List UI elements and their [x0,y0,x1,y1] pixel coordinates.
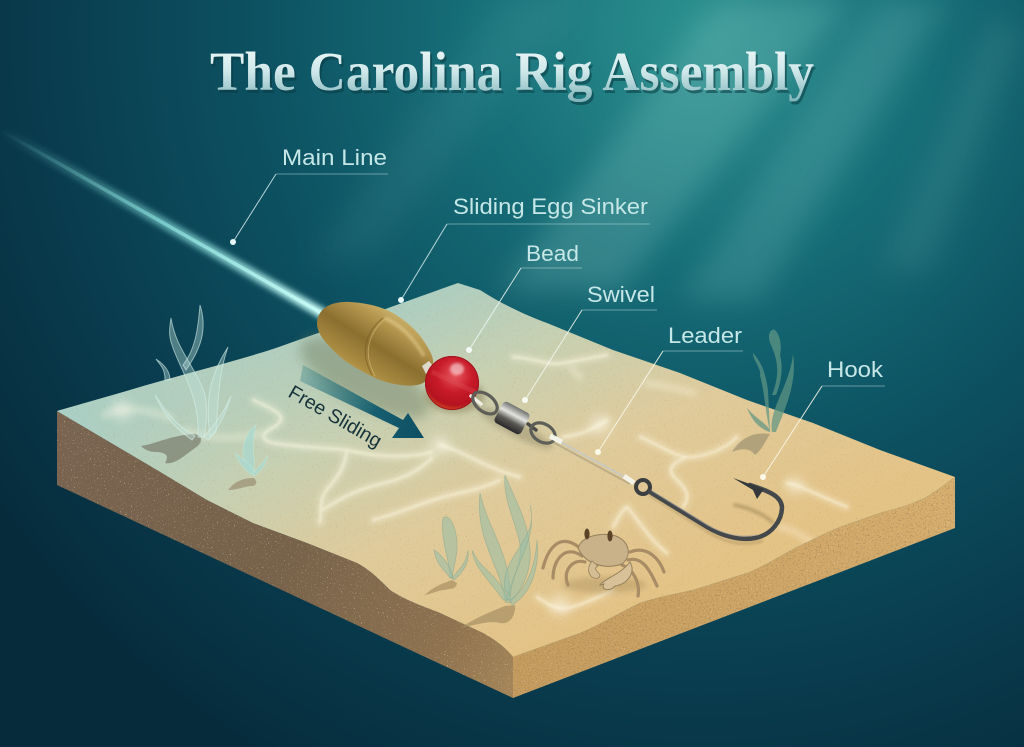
label: hook [760,357,885,480]
hook [636,478,782,543]
label: swivel: Swivel [587,282,655,307]
plant: back left seagrass [141,305,231,463]
label: sliding egg sinker: Sliding Egg Sinker [453,194,648,219]
main line [0,130,325,315]
swivel [469,388,559,455]
red bead [425,356,485,413]
sand block sides [57,411,955,698]
label: sliding egg sinker [398,194,650,303]
plant: front seagrass [425,475,538,628]
label: bead: Bead [526,241,579,266]
plant: small front left [228,425,268,490]
label: main line: Main Line [282,145,387,170]
leader line [550,436,634,484]
callout labels [230,145,885,480]
label: leader [595,323,743,455]
sliding egg sinker [317,302,433,386]
crab [543,528,664,596]
water caustics [105,355,847,615]
plant: back right seagrass [732,330,794,455]
directional arrow: free sliding [284,365,424,452]
caustic glow spots [113,401,803,615]
label: main line [230,145,388,245]
label: hook: Hook [827,357,884,382]
directional arrow: free sliding: Free Sliding [284,381,386,452]
light rays [310,0,1024,300]
label: swivel [522,282,657,403]
label: leader: Leader [668,323,742,348]
title: The Carolina Rig Assembly [212,44,816,105]
sand top surface [40,270,970,670]
label: bead [466,241,582,353]
sinker shadow [289,321,441,435]
title: The Carolina Rig Assembly [210,41,814,102]
